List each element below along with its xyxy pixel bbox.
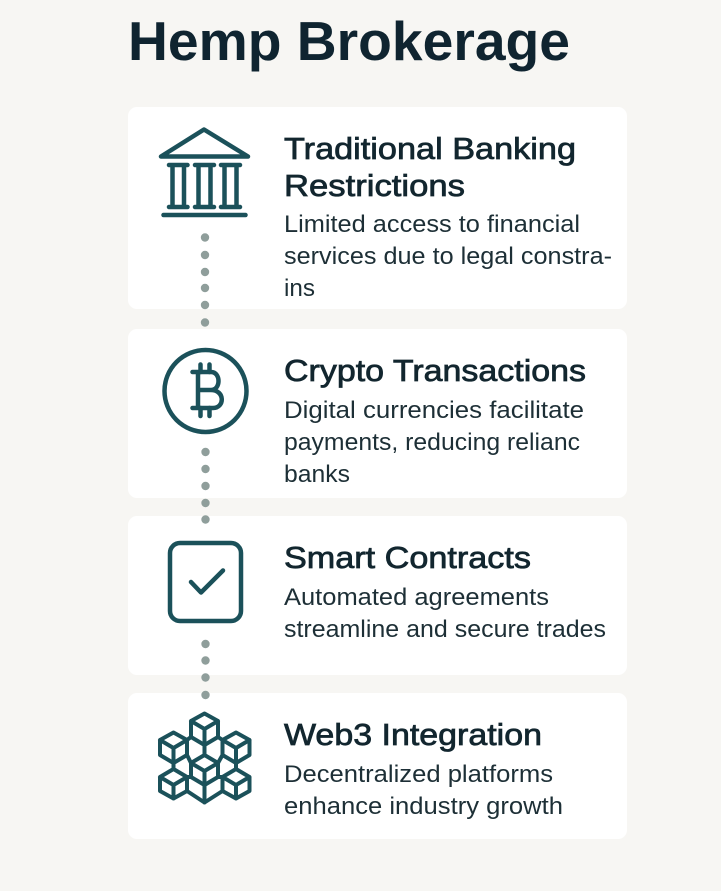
text: traditional banking description: services due to legal constra-	[284, 243, 612, 270]
bottom cube	[187, 785, 222, 802]
text: smart contracts description: Automated agreements	[284, 584, 549, 611]
center cube	[191, 755, 218, 785]
heading: smart contracts: Smart Contracts	[284, 540, 531, 575]
panel: web3 integration	[128, 693, 627, 839]
text: crypto description	[284, 397, 584, 488]
lower right cube	[222, 769, 250, 798]
text: smart contracts description	[284, 584, 606, 643]
text: web3 description	[284, 761, 563, 820]
text: traditional banking description: Limited access to financial	[284, 211, 580, 238]
panel: smart contracts	[128, 516, 627, 675]
icon: checkbox	[170, 543, 241, 621]
icon: bank building	[161, 130, 248, 215]
text: crypto description: payments, reducing relianc	[284, 429, 580, 456]
text: traditional banking description: ins	[284, 275, 315, 302]
title: Hemp Brokerage	[128, 10, 570, 72]
lower left cube	[160, 769, 187, 798]
text: smart contracts description: streamline and secure trades	[284, 616, 606, 643]
panel: traditional banking restrictions	[128, 107, 627, 309]
icon: bitcoin coin	[164, 350, 246, 432]
panel: crypto transactions	[128, 329, 627, 498]
text: web3 description: enhance industry growth	[284, 793, 563, 820]
icon: hexagonal blocks	[160, 714, 250, 802]
text: web3 description: Decentralized platforms	[284, 761, 553, 788]
heading: crypto transactions: Crypto Transactions	[284, 353, 586, 388]
connecting hexagons	[174, 737, 236, 777]
connector dots: bitcoin to checkbox	[201, 448, 210, 524]
text: crypto description: banks	[284, 461, 350, 488]
heading: traditional banking restrictions: Restrictions	[284, 168, 465, 203]
heading: traditional banking restrictions: Traditional Banking	[284, 131, 576, 166]
text: traditional banking description	[284, 211, 612, 302]
heading: web3 integration: Web3 Integration	[284, 717, 542, 752]
upper right cube	[222, 732, 250, 763]
connector dots: bank to bitcoin	[201, 233, 209, 327]
connector dots: checkbox to blocks	[201, 640, 210, 699]
upper left cube	[160, 732, 187, 763]
heading: traditional banking restrictions	[284, 131, 576, 203]
text: crypto description: Digital currencies facilitate	[284, 397, 584, 424]
top cube	[191, 714, 218, 745]
